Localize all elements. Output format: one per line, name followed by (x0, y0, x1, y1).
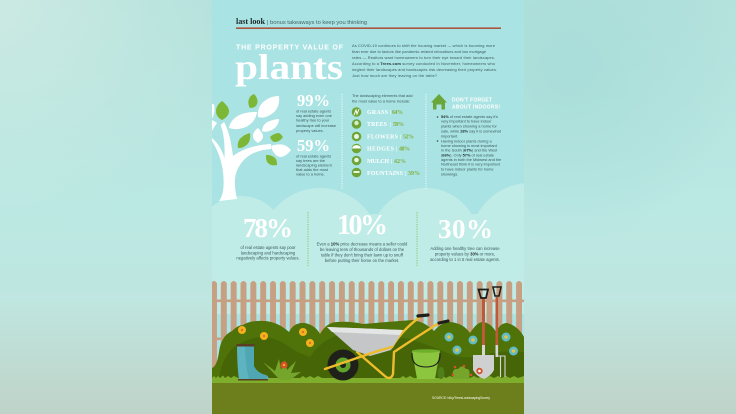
stat: 99%: landscape will increase (296, 123, 336, 128)
row: trees: TREES (367, 122, 388, 128)
row: flowers: | (400, 134, 401, 140)
stat: 59%: 59% (297, 136, 330, 155)
stat: 59% (296, 140, 332, 176)
stat: 99%: 99% (297, 91, 330, 110)
ground (212, 376, 524, 414)
panel: magazine page (212, 0, 524, 414)
stat: 30%: according to 1 in 5 real estate agents. (430, 257, 500, 262)
row: fountains: FOUNTAINS (367, 171, 404, 177)
icon: shovel (473, 290, 494, 379)
row: trees: | (390, 122, 391, 128)
indoor bullet list: showings. (441, 172, 458, 176)
stat: 30%: Adding one healthy tree can increase (430, 246, 500, 251)
title: THE PROPERTY VALUE OF (236, 44, 344, 52)
hedges (212, 320, 524, 380)
tree leaves (212, 94, 291, 165)
stat: 99%: say adding even one (296, 113, 332, 118)
row: hedges: 48% (399, 146, 410, 152)
indoor bullet list: agents in both the Midwest and the (441, 157, 501, 162)
stat: 10% (317, 210, 408, 263)
indoor bullet list (437, 114, 502, 176)
indoor bullet list: very important to have indoor (441, 118, 492, 124)
stat: 99%: property values. (296, 128, 324, 133)
icon: fork (493, 287, 505, 377)
icon: small plants (438, 365, 472, 379)
indoor bullet list: plants when showing a home for (441, 124, 498, 128)
intro paragraph: As COVID-19 continues to shift the housing market — which is booming more (352, 43, 495, 48)
stat: 30%: 30% (438, 214, 493, 244)
indoor heading (452, 98, 500, 108)
wheelbarrow tray (327, 327, 403, 356)
page header (236, 17, 501, 29)
row: hedges: | (396, 146, 397, 152)
stat: 78%: landscaping and hardscaping (241, 250, 296, 256)
row: trees: 59% (393, 122, 404, 128)
intro paragraph: neglect their landscapes and hardscapes risk decreasing their property values. (352, 67, 497, 72)
stat: 78%: negatively affects property values. (236, 256, 300, 260)
row: flowers (352, 132, 414, 141)
row: flowers: FLOWERS (367, 134, 399, 140)
icon: wheelbarrow (325, 315, 448, 380)
wheelbarrow wheel (328, 350, 358, 380)
stat: 99%: healthy tree to your (296, 118, 330, 122)
icon: boot (236, 344, 269, 380)
intro paragraph: Just how much are they leaving on the table? (352, 73, 438, 78)
indoor bullet list: to have indoor plants for home (441, 166, 494, 172)
stat: 99%: of real estate agents (296, 108, 331, 114)
stat: 10%: 10% (337, 210, 388, 241)
row: grass: | (390, 110, 391, 116)
page header: last look (236, 17, 265, 26)
wheelbarrow handles and frame (357, 317, 439, 378)
panel: indoor plants (431, 94, 502, 176)
row: grass: GRASS (367, 110, 389, 116)
indoor bullet list: (66%). Only 57% of real estate (441, 152, 494, 158)
stat: 30% (430, 220, 500, 262)
stat: 10%: be leaving tens of thousands of dollars on the (320, 247, 405, 252)
row: mulch: MULCH (367, 159, 389, 165)
stat: 59%: landscaping element (296, 162, 333, 168)
stat: 78% (236, 219, 300, 260)
row: fountains (352, 168, 420, 177)
hedge flowers (238, 326, 518, 356)
stat: 10%: Even a 10% price decrease means a seller could (317, 242, 408, 246)
row: grass (352, 107, 403, 117)
stat: 10%: table if they don't bring their lawn up to snuff (321, 252, 404, 258)
stat: 59%: of real estate agents (296, 154, 331, 158)
fence (212, 281, 524, 368)
panel: landscaping elements: the most value to a home include: (352, 98, 410, 104)
row: flowers: 52% (403, 134, 414, 140)
stat: 30%: property values by 30% or more, (435, 252, 495, 256)
indoor heading: DON'T FORGET (452, 98, 492, 104)
stat: 59%: value to a home. (296, 172, 325, 176)
stat: 78%: of real estate agents say poor (240, 245, 296, 250)
row: fountains: | (405, 171, 406, 177)
panel: landscaping elements (352, 93, 420, 177)
indoor bullet list: Northeast think it is very important (441, 162, 501, 166)
indoor bullet list: home showing is most important (441, 143, 498, 148)
icon: tree (212, 94, 291, 201)
stat: 59%: say trees are the (296, 158, 325, 163)
intro paragraph (352, 43, 497, 78)
row: grass: 64% (392, 110, 403, 116)
page header: | bonus takeaways to keep you thinking (267, 20, 367, 26)
indoor bullet list: Having indoor plants during a (441, 138, 492, 144)
stat: 59%: that adds the most (296, 167, 329, 172)
icon: bucket (412, 349, 440, 379)
intro paragraph: than ever due to factors like pandemic-related relocations and low mortgage (352, 49, 486, 54)
row: mulch: 42% (394, 159, 406, 165)
icon: house (431, 94, 447, 110)
row: fountains: 39% (408, 171, 420, 177)
icon: plant with red flower (263, 359, 301, 380)
source note: SOURCE: bit.ly/TreesLandscapingSurvey (432, 396, 490, 400)
row: trees (352, 119, 404, 129)
intro paragraph: According to a Trees.com survey conducted in November, homeowners who (352, 61, 495, 66)
indoor bullet list: sale, while 28% say it is somewhat (441, 128, 502, 134)
row: hedges: HEDGES (367, 146, 395, 152)
wheelbarrow grips (418, 315, 448, 323)
stat: 10%: before putting their home on the market. (325, 258, 399, 263)
row: mulch (352, 156, 406, 165)
indoor bullet list: in the South (67%) and the West (441, 148, 498, 152)
cloud band (212, 183, 524, 314)
stat: 78%: 78% (243, 213, 293, 243)
tree trunk (212, 122, 271, 201)
indoor bullet list: 54% of real estate agents say it's (441, 114, 498, 119)
indoor bullet list: important. (441, 134, 458, 138)
row: hedges (352, 144, 410, 153)
indoor heading: ABOUT INDOORS! (452, 104, 500, 110)
stat: 99% (296, 91, 336, 133)
intro paragraph: rates — Realtors want homeowners to turn their eye toward their landscapes. (352, 55, 495, 60)
panel: landscaping elements: The landscaping elements that add (352, 93, 413, 98)
row: mulch: | (391, 159, 392, 165)
title: plants (235, 47, 343, 87)
